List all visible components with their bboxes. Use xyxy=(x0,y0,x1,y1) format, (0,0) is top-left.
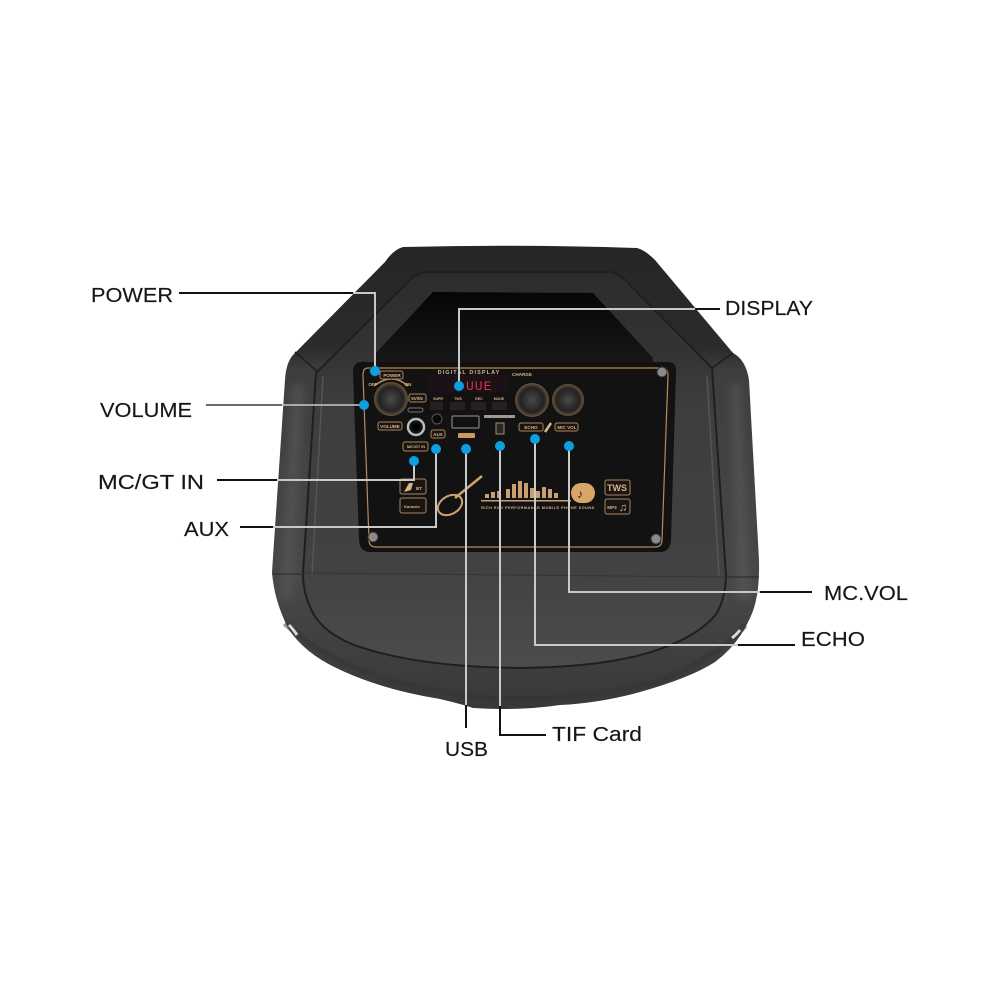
mode buttons: REC xyxy=(475,397,483,401)
led display: UUE xyxy=(466,379,492,394)
callout: display: DISPLAY xyxy=(725,298,813,320)
callout: power xyxy=(91,285,380,376)
badge: karaoke xyxy=(400,498,426,513)
usb port xyxy=(452,416,479,428)
label: mic gt in xyxy=(403,442,428,451)
callout: volume: VOLUME xyxy=(100,400,192,422)
badge: bluetooth xyxy=(400,479,426,494)
label: echo: ECHO xyxy=(524,425,538,430)
side highlights xyxy=(281,385,750,600)
callout: tif card xyxy=(495,441,642,746)
callout: usb xyxy=(445,444,488,761)
callout: aux: AUX xyxy=(184,519,229,541)
label: echo xyxy=(519,423,543,431)
mode buttons: TWS xyxy=(454,397,463,401)
mode buttons: SUPR xyxy=(433,397,443,401)
label: power: POWER xyxy=(383,373,401,378)
equalizer graphic xyxy=(481,481,571,502)
card icon xyxy=(496,423,504,434)
callout: volume xyxy=(100,400,369,422)
label: aux xyxy=(431,430,445,438)
mic jack xyxy=(408,419,424,435)
callout: mc vol xyxy=(564,441,908,605)
slogan: RICH END PERFORMANCE MOBILE PHONE SOUND xyxy=(481,506,595,510)
callout: usb: USB xyxy=(445,739,488,761)
speaker body xyxy=(272,246,759,709)
micro usb port xyxy=(408,408,423,412)
mode buttons: MODE xyxy=(494,397,505,401)
screws xyxy=(368,366,667,544)
card slot xyxy=(484,415,515,418)
music badge xyxy=(571,483,595,503)
badge: mp3 xyxy=(605,499,630,514)
led display xyxy=(429,375,507,394)
callout: mc gt in xyxy=(98,456,419,494)
callout: power: POWER xyxy=(91,285,173,307)
callout: echo: ECHO xyxy=(801,629,865,651)
badge: bluetooth: BT xyxy=(416,486,422,491)
badge: tws xyxy=(605,480,630,495)
volume knob: ON xyxy=(405,382,412,387)
callout: echo xyxy=(530,434,865,651)
label: 5v in: 5V/IN xyxy=(411,396,423,401)
callout: mc vol: MC.VOL xyxy=(824,583,908,605)
badge: tws: TWS xyxy=(607,483,627,493)
badge: mp3: MP3 xyxy=(607,505,617,510)
label: volume xyxy=(378,422,402,430)
label: mic gt in: MIC/GT IN xyxy=(407,445,425,449)
control panel xyxy=(353,362,676,552)
callout: mc gt in: MC/GT IN xyxy=(98,472,204,494)
icon: guitar xyxy=(434,476,482,519)
label: aux: AUX xyxy=(433,432,444,437)
mic vol knob xyxy=(552,384,584,416)
label: mic vol xyxy=(555,423,578,431)
mode buttons xyxy=(430,397,507,410)
label: charge: CHARGE xyxy=(512,372,532,377)
callout: tif card: TIF Card xyxy=(552,724,642,746)
label: mic vol: MIC VOL xyxy=(557,425,577,430)
echo knob xyxy=(515,383,549,417)
volume knob xyxy=(368,379,412,416)
label: volume: VOLUME xyxy=(380,424,400,429)
volume knob: OFF xyxy=(368,382,378,387)
callout: aux xyxy=(184,444,441,541)
aux jack xyxy=(432,414,442,424)
heading: digital display: DIGITAL DISPLAY xyxy=(438,370,500,376)
usb tag xyxy=(458,433,475,438)
label: power xyxy=(380,371,403,379)
badge: karaoke: Karaoke xyxy=(404,504,421,509)
icon: microphone xyxy=(545,423,551,432)
callout: display xyxy=(454,298,813,391)
music badge: ♪ xyxy=(577,487,583,501)
badge: mp3: ♫ xyxy=(619,502,627,514)
label: 5v in xyxy=(409,394,426,402)
